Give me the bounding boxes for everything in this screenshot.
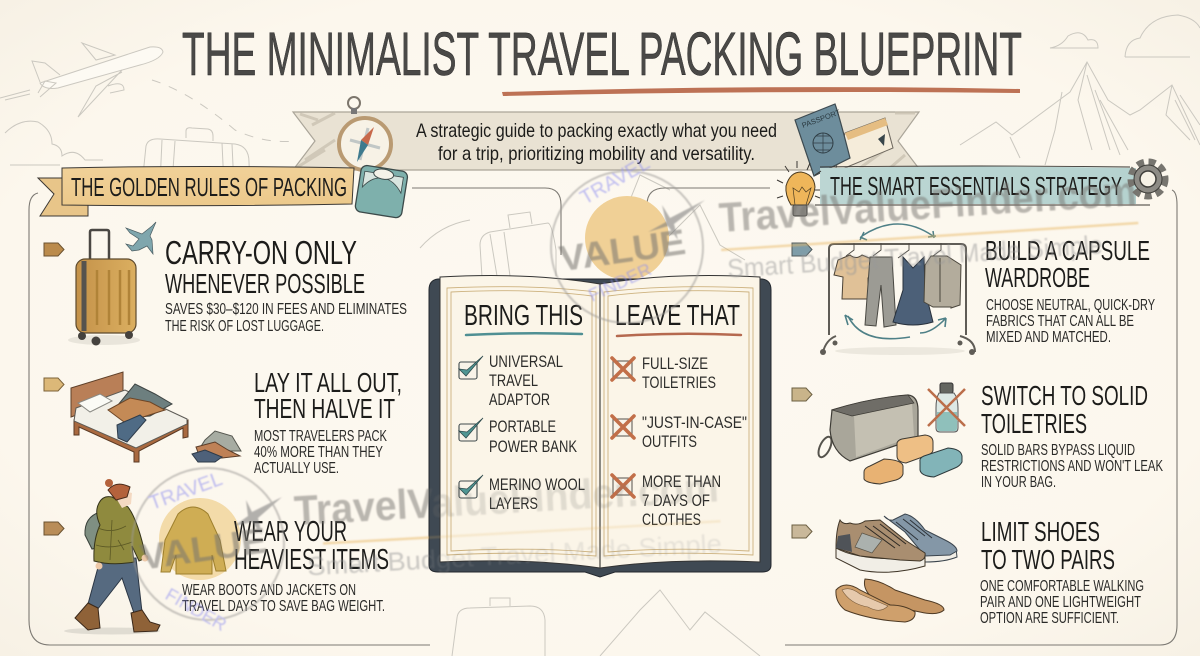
strategy 1: capsule wardrobe: [792, 224, 1155, 355]
watermark: top right site name: [718, 167, 1140, 284]
rule description: [165, 301, 407, 335]
icon: jacket: [161, 507, 226, 574]
strategy heading: LIMIT SHOES: [981, 516, 1100, 547]
checklist item: portable power bank: PORTABLE: [489, 417, 556, 436]
checklist item: just-in-case outfits: OUTFITS: [642, 432, 697, 451]
rule description: [182, 582, 385, 615]
rule description: 40% MORE THAN THEY: [254, 444, 383, 461]
checklist item: universal travel adaptor: UNIVERSAL: [489, 352, 563, 371]
watermark: top right site name: TravelValueFinder.com: [718, 167, 1138, 241]
checklist item: universal travel adaptor: [459, 352, 563, 409]
rule description: THE RISK OF LOST LUGGAGE.: [165, 318, 324, 335]
strategy description: IN YOUR BAG.: [981, 474, 1056, 491]
rule heading: HEAVIEST ITEMS: [234, 544, 389, 576]
checklist item: portable power bank: POWER BANK: [489, 437, 577, 456]
strategy description: [986, 297, 1155, 346]
icon: passport and boarding pass: [795, 104, 893, 176]
rule heading: [165, 234, 365, 299]
watermark: lower left stamp: VALUE: [138, 519, 269, 578]
strategy description: FABRICS THAT CAN ALL BE: [986, 313, 1134, 330]
strategy description: SOLID BARS BYPASS LIQUID: [981, 442, 1135, 459]
icon: yellow suitcase: [68, 230, 140, 346]
watermark: lower left site name: [293, 478, 721, 576]
heading banner: smart essentials: [815, 166, 1150, 205]
bullet: [44, 522, 64, 535]
watermark: centre stamp: VALUE: [557, 221, 688, 279]
bullet: [792, 525, 812, 538]
icon: light bulb: [777, 161, 821, 216]
checklist item: full-size toiletries: TOILETRIES: [642, 373, 716, 392]
checklist item: merino wool layers: [459, 475, 585, 513]
checklist item: universal travel adaptor: TRAVEL: [489, 371, 538, 390]
subtitle text: A strategic guide to packing exactly what you need: [416, 120, 777, 142]
subtitle banner: [293, 112, 920, 170]
heading banner: golden rules: [38, 166, 354, 216]
icon: compass: [339, 97, 391, 170]
strategy description: PAIR AND ONE LIGHTWEIGHT: [980, 594, 1141, 611]
decorative page frame: [447, 287, 753, 556]
strategy heading: WARDROBE: [985, 262, 1090, 293]
watermark: top right site name: Smart Budget Travel Made Simple: [726, 229, 1104, 284]
watermark: lower left stamp: TRAVEL: [146, 468, 225, 515]
watermark: lower left site name: TravelValueFinder.com: [293, 463, 720, 534]
title underline: [502, 87, 1020, 96]
icon: tan sneaker: [836, 520, 925, 572]
icon: bed with clothes: [71, 372, 188, 462]
background sketch: suitcase: [142, 128, 250, 187]
leave that column: LEAVE THAT: [615, 300, 740, 332]
open book: bring this / leave that: [429, 276, 771, 577]
watermark: centre stamp: TRAVEL: [576, 152, 654, 209]
rule description: SAVES $30–$120 IN FEES AND ELIMINATES: [165, 301, 407, 318]
bring this column: BRING THIS: [464, 300, 583, 332]
rule heading: [254, 367, 402, 424]
rule 3: wear your heaviest items: [44, 479, 389, 634]
bullet: [44, 378, 64, 391]
icon: small plane: [126, 222, 156, 254]
bullet: [792, 243, 812, 256]
checklist item: more than 7 days of clothes: 7 DAYS OF: [642, 491, 710, 510]
icon: clothes rack: [820, 224, 975, 355]
rule heading: [234, 516, 389, 576]
bullet: [792, 388, 812, 401]
checklist item: more than 7 days of clothes: MORE THAN: [642, 472, 721, 491]
rule heading: THEN HALVE IT: [254, 393, 395, 424]
background sketch: clouds and mountains: [960, 15, 1200, 165]
icon: blue sneaker: [884, 514, 957, 562]
checklist item: merino wool layers: MERINO WOOL: [489, 475, 585, 494]
strategy heading: [981, 516, 1115, 575]
rule heading: WEAR YOUR: [234, 516, 347, 548]
watermark: centre stamp: FINDER: [585, 259, 654, 306]
icon: solid soap bars: [864, 435, 962, 484]
rule 2: lay it all out: [44, 367, 402, 477]
rule heading: LAY IT ALL OUT,: [254, 367, 402, 398]
strategy heading: [981, 380, 1148, 439]
icon: clothes pile: [192, 431, 241, 462]
strategy description: MIXED AND MATCHED.: [986, 329, 1111, 346]
heading banner: golden rules: THE GOLDEN RULES OF PACKING: [71, 172, 347, 202]
rule heading: WHENEVER POSSIBLE: [165, 268, 365, 299]
strategy 3: limit shoes: [792, 514, 1144, 627]
subtitle text: [416, 120, 777, 165]
icon: toiletry bag: [816, 395, 918, 461]
strategy description: [981, 442, 1163, 491]
watermark: centre stamp: [551, 152, 705, 323]
icon: tan flats: [836, 579, 944, 622]
subtitle text: for a trip, prioritizing mobility and versatility.: [438, 143, 755, 165]
leave that column: [612, 300, 747, 529]
strategy heading: TO TWO PAIRS: [981, 544, 1115, 575]
panel: golden rules outline: [29, 188, 561, 645]
checklist item: just-in-case outfits: "JUST-IN-CASE": [642, 413, 747, 432]
strategy heading: TOILETRIES: [981, 408, 1087, 439]
book cover: [429, 279, 771, 577]
checklist item: merino wool layers: LAYERS: [489, 494, 538, 513]
rule 1: carry-on only: [44, 222, 407, 346]
checklist item: more than 7 days of clothes: CLOTHES: [642, 510, 701, 529]
rule heading: CARRY-ON ONLY: [165, 234, 357, 271]
checklist item: just-in-case outfits: [612, 413, 747, 451]
checklist item: full-size toiletries: FULL-SIZE: [642, 354, 708, 373]
checklist item: full-size toiletries: [612, 354, 716, 392]
checklist item: more than 7 days of clothes: [612, 472, 721, 529]
checklist item: universal travel adaptor: ADAPTOR: [489, 390, 550, 409]
icon: bathroom scale: [355, 165, 408, 218]
rule description: [254, 428, 387, 477]
bullet: [44, 243, 64, 256]
strategy heading: [985, 235, 1150, 293]
icon: walking traveler: [64, 479, 160, 634]
rule description: ACTUALLY USE.: [254, 460, 339, 477]
bring this column: [459, 300, 585, 513]
rule description: MOST TRAVELERS PACK: [254, 428, 387, 445]
stamp sun behind lower-left item: [159, 498, 241, 580]
icon: gear: [1131, 162, 1165, 196]
rule description: WEAR BOOTS AND JACKETS ON: [182, 582, 356, 599]
icon: passport and boarding pass: PASSPORT: [801, 108, 842, 130]
strategy description: OPTION ARE SUFFICIENT.: [980, 610, 1119, 627]
watermark: lower left stamp: [132, 468, 284, 635]
book pages: [440, 276, 760, 568]
strategy description: [980, 578, 1144, 627]
panel: smart essentials outline: [647, 188, 1177, 645]
watermark: lower left site name: Smart Budget Travel Made Simple: [306, 528, 723, 581]
watermark: lower left stamp: FINDER: [162, 584, 230, 635]
stamp sun behind the book: [585, 196, 669, 280]
background sketch: airplane and flight path: [0, 43, 295, 165]
strategy 2: solid toiletries: [792, 380, 1163, 491]
icon: crossed-out bottle: [928, 383, 965, 432]
background sketches in the centre: [420, 175, 760, 656]
checklist item: portable power bank: [459, 417, 577, 456]
rule description: TRAVEL DAYS TO SAVE BAG WEIGHT.: [182, 598, 385, 615]
